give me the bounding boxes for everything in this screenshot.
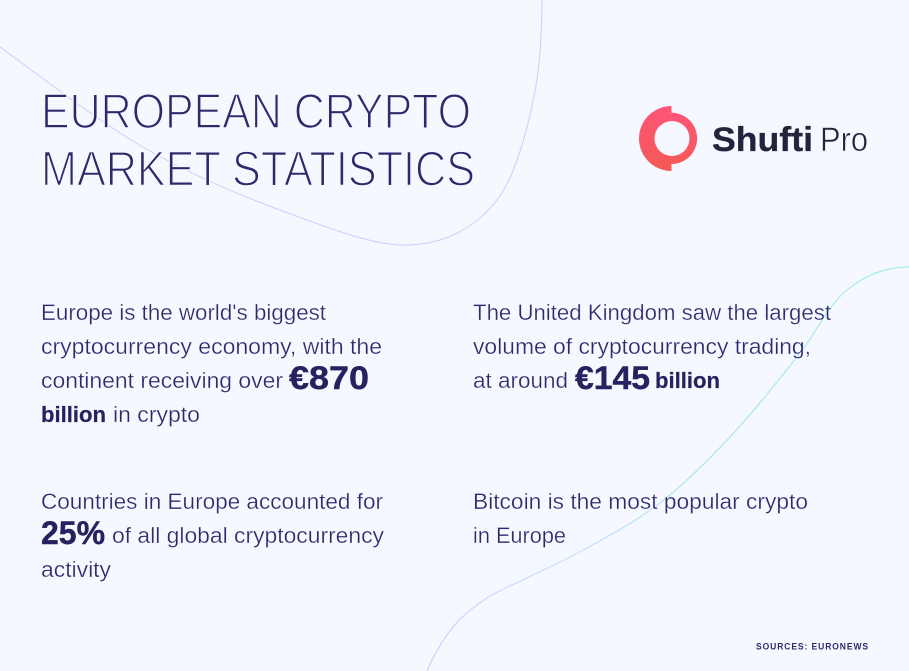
text block: United Kingdom volume: €145 <box>575 360 650 396</box>
text block: Europe biggest economy <box>41 300 382 427</box>
logo: Shufti Pro <box>639 106 868 171</box>
text block: Europe biggest economy: continent receiving over <box>41 368 284 393</box>
title <box>41 85 475 196</box>
text block: Bitcoin most popular: in Europe <box>473 523 566 548</box>
text block: Europe biggest economy: Europe is the world's biggest <box>41 300 327 325</box>
logo wordmark <box>712 121 868 159</box>
text block: United Kingdom volume: The United Kingdom saw the largest <box>473 300 832 325</box>
text block: 25% of activity: of all global cryptocurrency <box>112 523 385 548</box>
logo wordmark: Pro <box>820 121 868 159</box>
text block: 25% of activity: activity <box>41 557 112 582</box>
text block: Europe biggest economy: billion <box>41 402 106 427</box>
logo wordmark: Shufti <box>712 121 813 159</box>
text block: 25% of activity <box>41 489 385 582</box>
sources note: SOURCES: EURONEWS <box>756 642 869 652</box>
text block: United Kingdom volume: billion <box>655 368 720 393</box>
decorative curve: top lavender <box>0 0 542 245</box>
title: MARKET STATISTICS <box>41 142 475 196</box>
text block: Bitcoin most popular: Bitcoin is the most popular crypto <box>473 489 808 514</box>
title: EUROPEAN CRYPTO <box>41 85 471 139</box>
text block: United Kingdom volume: volume of cryptocurrency trading, <box>473 334 811 359</box>
text block: 25% of activity: Countries in Europe accounted for <box>41 489 383 514</box>
text block: 25% of activity: 25% <box>41 515 105 551</box>
text block: Europe biggest economy: €870 <box>289 360 369 396</box>
text block: Europe biggest economy: in crypto <box>113 402 200 427</box>
text block: Bitcoin most popular <box>473 489 808 548</box>
text block: Europe biggest economy: cryptocurrency economy, with the <box>41 334 382 359</box>
decorative curve: teal to lavender <box>427 267 909 671</box>
text block: United Kingdom volume: at around <box>473 368 568 393</box>
text block: United Kingdom volume <box>473 300 832 396</box>
icon: logo ring <box>639 106 697 171</box>
